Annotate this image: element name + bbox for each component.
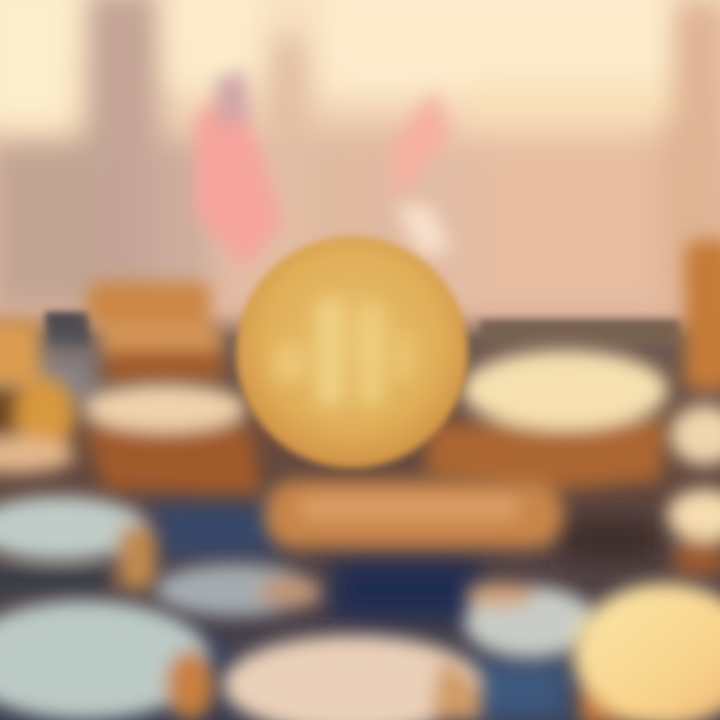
icon: left flag <box>195 70 282 268</box>
coin: lying centre bar <box>265 480 563 548</box>
coin: bottom centre cream coin <box>223 635 483 720</box>
icon: right flag <box>392 90 452 255</box>
coin stack: centre left plate <box>83 384 262 495</box>
coin: bottom right bright gold coin <box>573 583 720 720</box>
skyline: blurred buildings <box>0 0 720 320</box>
coin: lower middle pale coin <box>155 564 322 616</box>
coin stack: upper left <box>88 282 223 382</box>
coin stack: far right <box>667 240 720 575</box>
coin: central gold coin <box>236 236 468 468</box>
sky: bright highlights <box>0 0 670 125</box>
coin: lower left pale coin stack <box>0 496 156 592</box>
lower background: table colour patches <box>0 350 660 720</box>
coin stack: far left <box>0 320 75 473</box>
coin: lower right pale coin <box>464 583 596 658</box>
coin: bottom left large pale coin <box>0 600 214 720</box>
coin stack: right large <box>425 350 668 492</box>
coin emblem <box>275 300 414 405</box>
dark horizon band <box>45 312 680 348</box>
